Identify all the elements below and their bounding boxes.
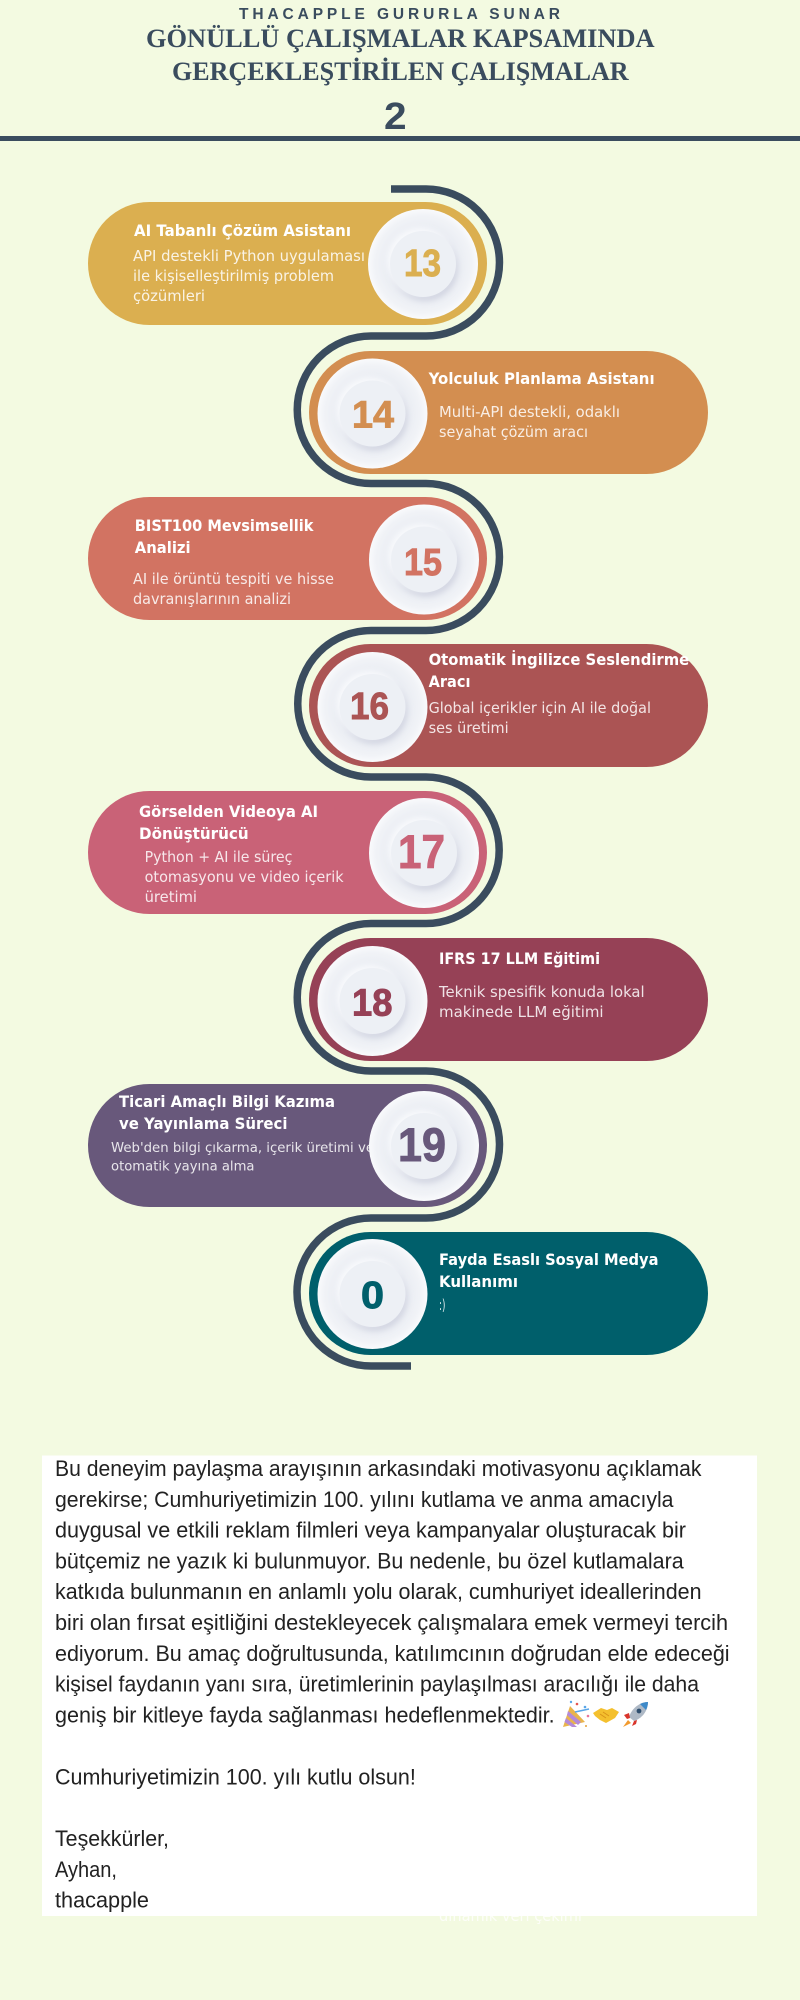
pill xyxy=(309,938,708,1061)
card description xyxy=(438,983,645,1021)
header xyxy=(0,6,800,141)
number disc xyxy=(318,946,428,1056)
card title: Yolculuk Planlama Asistanı xyxy=(428,369,655,388)
motivation paragraph: bütçemiz ne yazık ki bulunmuyor. Bu nedenle, bu özel kutlamalara xyxy=(55,1548,684,1573)
pill xyxy=(88,497,487,620)
card title xyxy=(439,1250,658,1291)
number disc: 19 xyxy=(398,1118,446,1171)
icon: rocket xyxy=(623,1702,648,1727)
card title: Ticari Amaçlı Bilgi Kazıma xyxy=(119,1092,335,1111)
part number: 2 xyxy=(384,96,407,138)
card description: Teknik spesifik konuda lokal xyxy=(438,983,645,1001)
card description: davranışlarının analizi xyxy=(133,590,291,608)
number disc: 15 xyxy=(404,542,442,584)
number disc xyxy=(369,1091,479,1201)
pill xyxy=(88,1084,487,1207)
pill xyxy=(88,791,487,914)
card title: IFRS 17 LLM Eğitimi xyxy=(439,949,600,968)
card 14 xyxy=(309,351,708,474)
card title xyxy=(135,516,314,557)
header rule xyxy=(0,136,800,141)
card description: makinede LLM eğitimi xyxy=(439,1003,604,1021)
ghost text behind panel: dinamik veri çekimi xyxy=(439,1907,582,1925)
card description: API destekli Python uygulaması xyxy=(133,247,365,265)
motivation paragraph: katkıda bulunmanın en anlamlı yolu olarak, cumhuriyet ideallerinden xyxy=(55,1579,702,1604)
card title: AI Tabanlı Çözüm Asistanı xyxy=(134,221,351,240)
card description: Global içerikler için AI ile doğal xyxy=(429,699,651,717)
card description: Python + AI ile süreç xyxy=(145,848,292,866)
card title xyxy=(429,650,689,691)
motivation paragraph: geniş bir kitleye fayda sağlanması hedeflenmektedir. xyxy=(55,1702,555,1727)
card title: Aracı xyxy=(429,672,470,691)
card description: :) xyxy=(439,1296,446,1314)
number disc xyxy=(318,1239,428,1349)
card 19 xyxy=(88,1084,487,1207)
card description xyxy=(133,570,334,608)
motivation paragraph: kişisel faydanın yanı sıra, üretimlerinin paylaşılması aracılığı ile daha xyxy=(55,1672,700,1697)
closing line: Cumhuriyetimizin 100. yılı kutlu olsun! xyxy=(55,1764,416,1790)
card title xyxy=(139,802,318,843)
pill xyxy=(88,202,487,325)
panel background xyxy=(42,1456,757,1916)
motivation paragraph: biri olan fırsat eşitliğini destekleyecek çalışmalara emek vermeyi tercih xyxy=(55,1610,728,1635)
number disc: 18 xyxy=(352,983,392,1025)
motivation paragraph xyxy=(55,1456,730,1727)
card description: seyahat çözüm aracı xyxy=(439,423,588,441)
title line 1: GÖNÜLLÜ ÇALIŞMALAR KAPSAMINDA xyxy=(146,24,655,53)
card description xyxy=(429,699,651,737)
card description: AI ile örüntü tespiti ve hisse xyxy=(133,570,334,588)
number disc xyxy=(318,358,428,468)
card title xyxy=(119,1092,335,1133)
message panel xyxy=(42,1456,757,1916)
number disc xyxy=(318,652,428,762)
card 18 xyxy=(309,938,708,1061)
card 16 xyxy=(309,644,708,767)
presenter line: THACAPPLE GURURLA SUNAR xyxy=(239,6,560,23)
card description xyxy=(133,247,365,305)
card description: ile kişiselleştirilmiş problem xyxy=(133,267,334,285)
number disc: 16 xyxy=(350,686,389,728)
card description xyxy=(439,403,620,441)
card 15 xyxy=(88,497,487,620)
card description: çözümleri xyxy=(133,287,205,305)
card 0 xyxy=(309,1232,708,1355)
card description: Multi-API destekli, odaklı xyxy=(439,403,620,421)
card description: otomasyonu ve video içerik xyxy=(145,868,344,886)
number disc: 14 xyxy=(352,394,394,436)
card title: Analizi xyxy=(135,538,191,557)
card description xyxy=(111,1140,374,1175)
number disc xyxy=(368,209,478,319)
motivation paragraph: duygusal ve etkili reklam filmleri veya kampanyalar oluşturacak bir xyxy=(55,1518,686,1543)
serpentine track xyxy=(297,189,500,1366)
card title: Dönüştürücü xyxy=(139,824,249,843)
number disc: 13 xyxy=(404,243,441,285)
pill xyxy=(309,1232,708,1355)
card description xyxy=(145,848,344,906)
number disc: 17 xyxy=(398,825,445,878)
icon: handshake xyxy=(593,1708,619,1723)
signature: thacapple xyxy=(55,1888,149,1912)
card title: Kullanımı xyxy=(439,1272,518,1291)
icon: party popper xyxy=(563,1701,589,1727)
card title: ve Yayınlama Süreci xyxy=(119,1114,288,1133)
card title: Otomatik İngilizce Seslendirme xyxy=(429,650,689,669)
card 13 xyxy=(88,202,487,325)
card description: ses üretimi xyxy=(429,719,509,737)
card title: BIST100 Mevsimsellik xyxy=(135,516,314,535)
signature: Teşekkürler, xyxy=(55,1826,169,1851)
number disc xyxy=(369,504,479,614)
pill xyxy=(309,351,708,474)
card description: otomatik yayına alma xyxy=(111,1159,254,1175)
number disc xyxy=(369,798,479,908)
signature xyxy=(55,1826,169,1912)
card title: Fayda Esaslı Sosyal Medya xyxy=(439,1250,658,1269)
motivation paragraph: ediyorum. Bu amaç doğrultusunda, katılımcının doğrudan elde edeceği xyxy=(55,1641,730,1666)
card title: Görselden Videoya AI xyxy=(139,802,318,821)
card 17 xyxy=(88,791,487,914)
motivation paragraph: gerekirse; Cumhuriyetimizin 100. yılını kutlama ve anma amacıyla xyxy=(55,1487,674,1512)
number disc: 0 xyxy=(361,1275,384,1317)
title line 2: GERÇEKLEŞTİRİLEN ÇALIŞMALAR xyxy=(172,57,629,86)
signature: Ayhan, xyxy=(55,1857,117,1882)
card description: Web'den bilgi çıkarma, içerik üretimi ve xyxy=(111,1140,374,1156)
motivation paragraph: Bu deneyim paylaşma arayışının arkasındaki motivasyonu açıklamak xyxy=(55,1456,702,1481)
card description: üretimi xyxy=(145,888,197,906)
pill xyxy=(309,644,708,767)
